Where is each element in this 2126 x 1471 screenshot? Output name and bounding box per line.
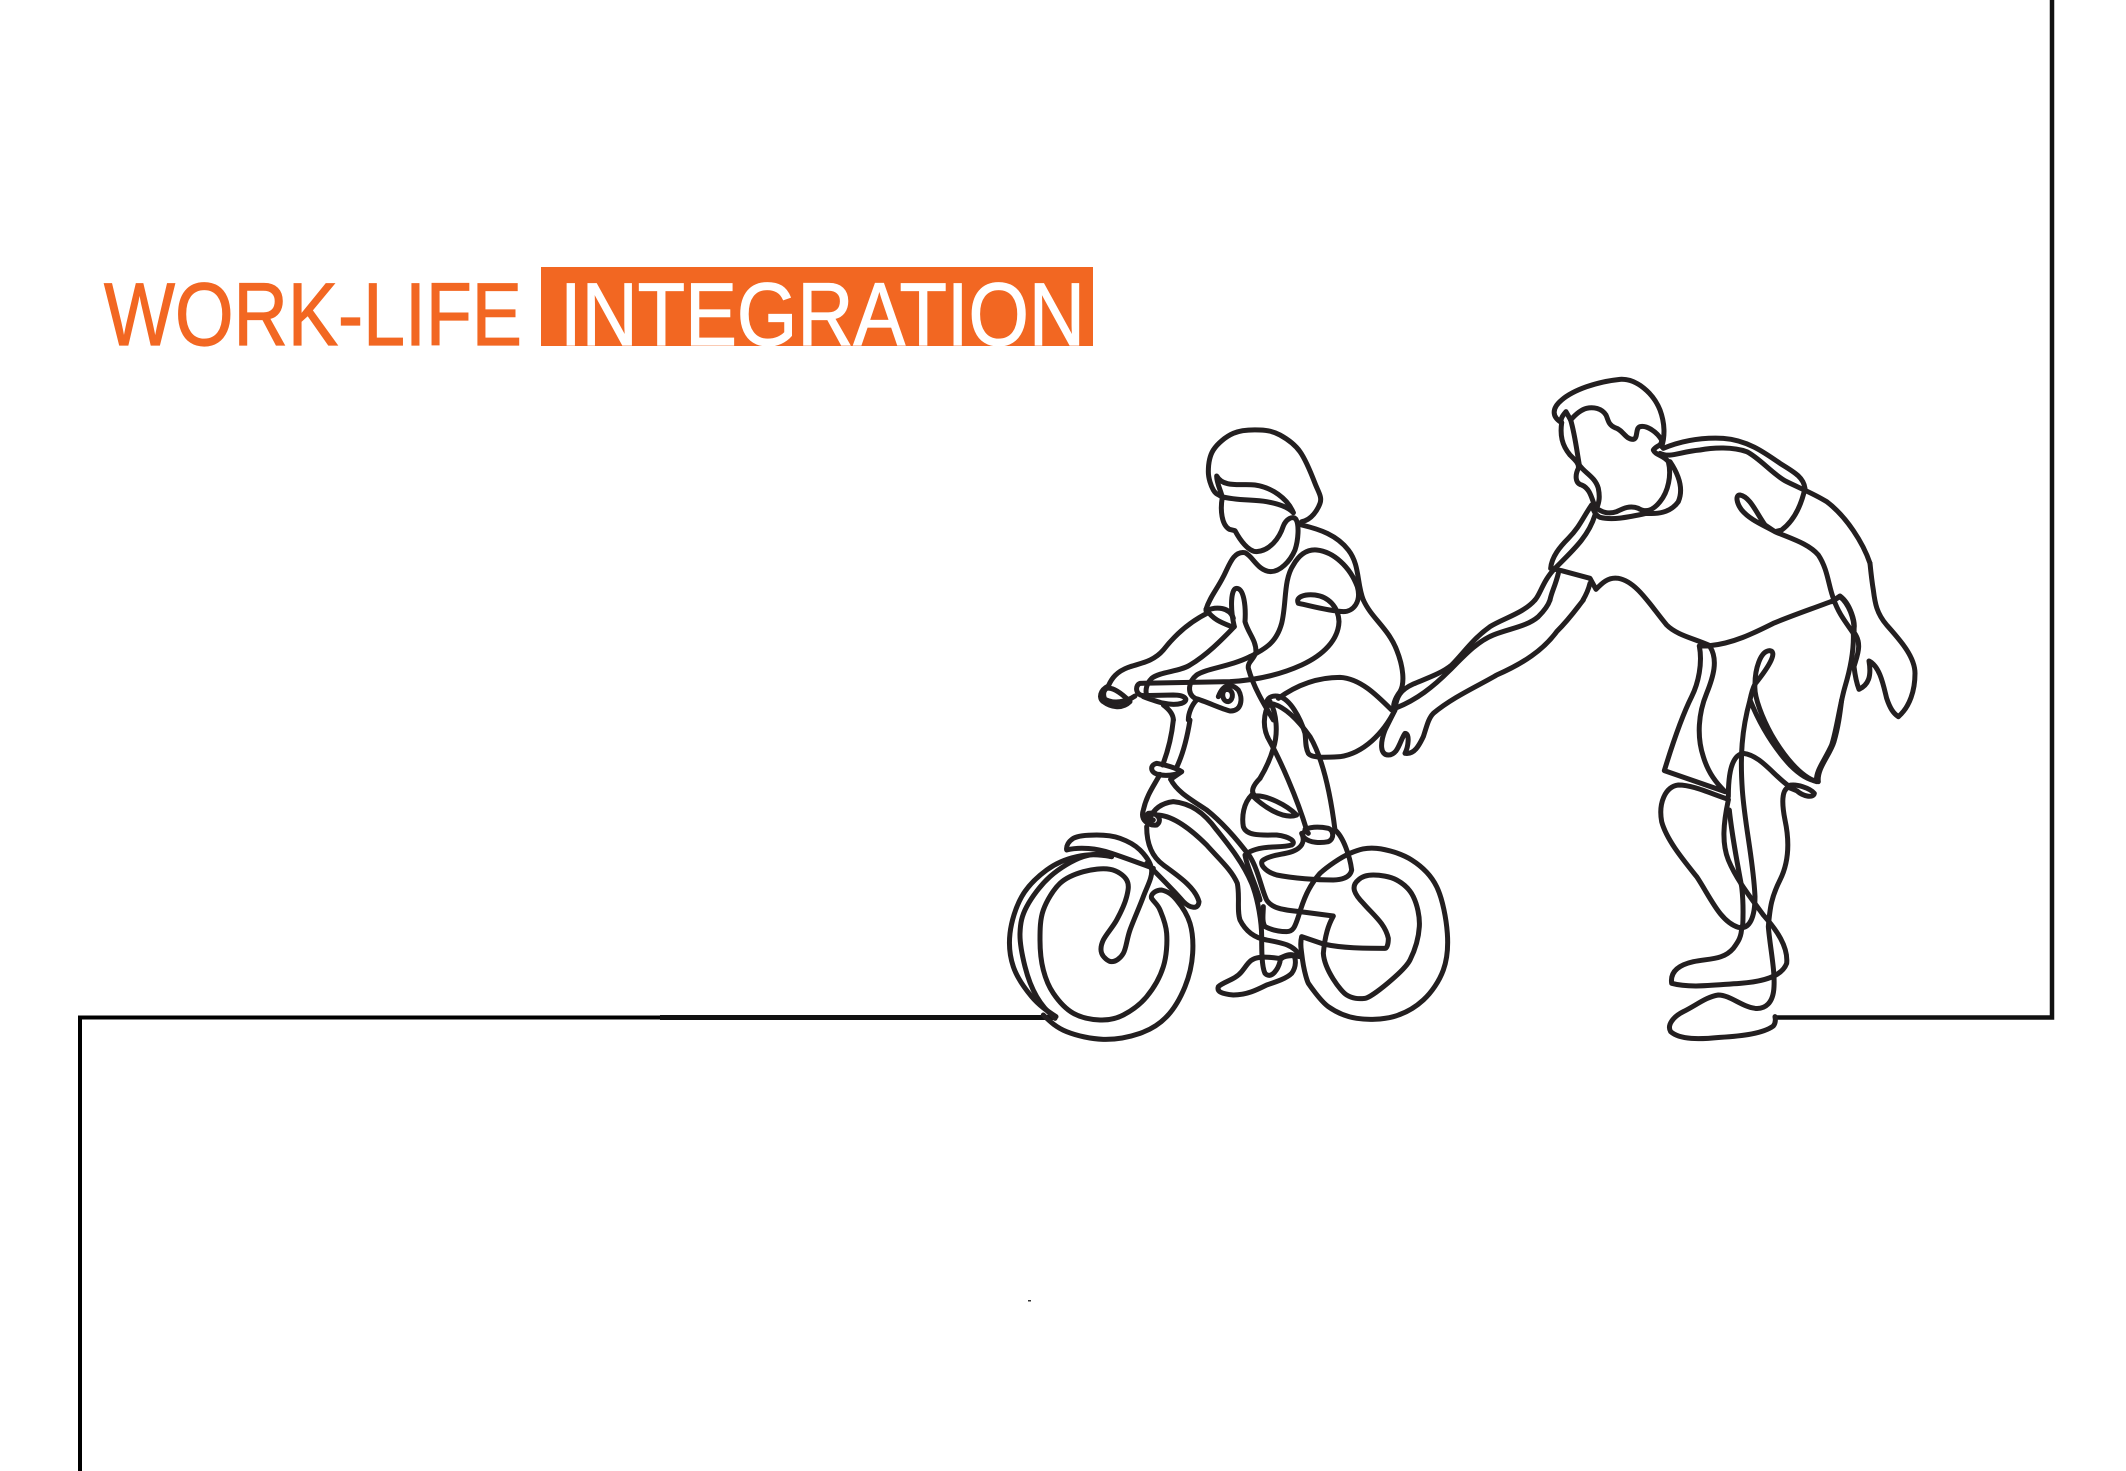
child torso, thigh and parent's hand (1260, 600, 1583, 830)
stray ink dot (1028, 1300, 1031, 1302)
parent trousers and back hand (1664, 563, 1915, 792)
child upper body (1101, 430, 1363, 720)
illustration: parent helping child ride a bicycle (1009, 379, 1915, 1039)
title highlight box (541, 267, 1093, 346)
title (104, 264, 1093, 364)
title word: WORK-LIFE: WORK-LIFE (104, 264, 522, 364)
parent legs and feet (1661, 700, 1842, 1039)
parent upper body (1535, 379, 1870, 646)
title word: INTEGRATION: INTEGRATION (560, 264, 1085, 364)
bicycle and child's legs (1009, 720, 1448, 1039)
